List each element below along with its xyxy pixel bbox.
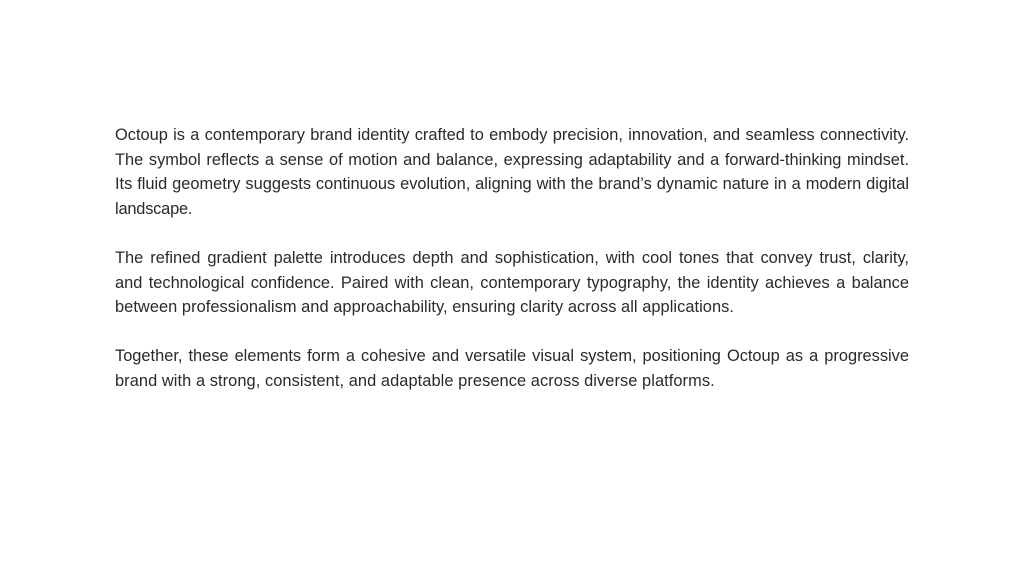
paragraph 2: gradient palette and typography (115, 249, 909, 316)
paragraph 1: brand overview (115, 126, 909, 218)
paragraph 2: gradient palette and typography: between professionalism and approachability, ensuring clarity across all applications. (115, 298, 734, 316)
paragraph 3: cohesive visual system (115, 347, 909, 390)
paragraph 1: brand overview: The symbol reflects a sense of motion and balance, expressing adaptability and a forward-thinking mindset. (115, 150, 909, 168)
paragraph 1: brand overview: Octoup is a contemporary brand identity crafted to embody precision, innovation, and seamless connectivity. (115, 126, 909, 144)
paragraph 2: gradient palette and typography: and technological confidence. Paired with clean, contemporary typography, the identity achieves a balance (115, 274, 909, 292)
paragraph 3: cohesive visual system: brand with a strong, consistent, and adaptable presence across diverse platforms. (115, 372, 715, 390)
text block: brand identity description (115, 126, 909, 390)
paragraph 2: gradient palette and typography: The refined gradient palette introduces depth and sophistication, with cool tones that convey trust, clarity, (115, 249, 909, 267)
paragraph 1: brand overview: Its fluid geometry suggests continuous evolution, aligning with the brand’s dynamic nature in a modern digital (115, 175, 909, 193)
paragraph 1: brand overview: landscape. (115, 200, 192, 218)
paragraph 3: cohesive visual system: Together, these elements form a cohesive and versatile visual system, positioning Octoup as a progressive (115, 347, 909, 365)
